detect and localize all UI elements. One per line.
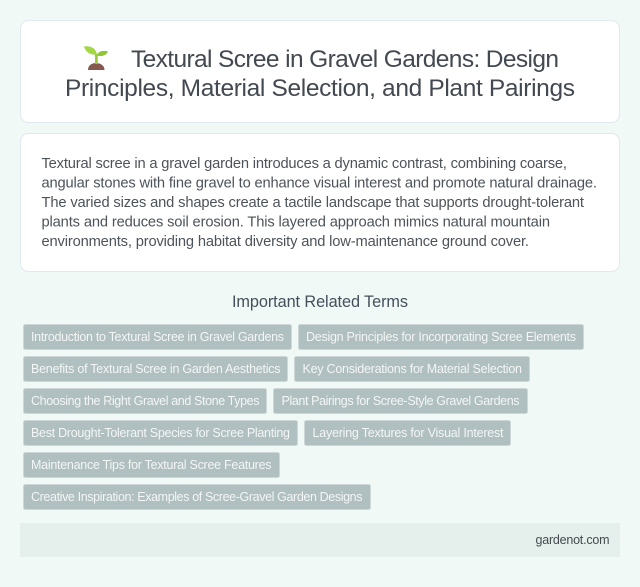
tag: drought-tolerant species bbox=[24, 420, 298, 446]
tag: maintenance tips bbox=[24, 452, 280, 478]
tag: choosing gravel bbox=[24, 388, 266, 414]
title bbox=[65, 46, 575, 102]
description text: plants and reduces soil erosion. This layered approach mimics natural mountain bbox=[42, 214, 550, 230]
tag: key considerations bbox=[294, 356, 530, 382]
tag: introduction bbox=[24, 324, 292, 350]
tag: design principles bbox=[298, 324, 584, 350]
icon: sprout bbox=[84, 46, 108, 70]
description text: Textural scree in a gravel garden introduces a dynamic contrast, combining coarse, bbox=[42, 156, 567, 172]
footer site name: gardenot.com bbox=[536, 533, 610, 547]
related terms tags bbox=[24, 324, 584, 510]
footer bbox=[20, 523, 620, 557]
tag: layering textures: Layering Textures for Visual Interest bbox=[312, 426, 504, 440]
tag: creative inspiration: Creative Inspiration: Examples of Scree-Gravel Garden Designs bbox=[31, 490, 362, 504]
tag: key considerations: Key Considerations for Material Selection bbox=[302, 362, 522, 376]
title: Principles, Material Selection, and Plant Pairings bbox=[65, 75, 575, 102]
description text: The varied sizes and shapes create a tactile landscape that supports drought-tolerant bbox=[42, 195, 584, 211]
tag: introduction: Introduction to Textural Scree in Gravel Gardens bbox=[31, 330, 284, 344]
tag: benefits: Benefits of Textural Scree in Garden Aesthetics bbox=[31, 362, 280, 376]
tag: plant pairings bbox=[274, 388, 528, 414]
tag: layering textures bbox=[304, 420, 510, 446]
tag: design principles: Design Principles for Incorporating Scree Elements bbox=[306, 330, 576, 344]
panel: title card bbox=[20, 20, 620, 122]
tag: plant pairings: Plant Pairings for Scree-Style Gravel Gardens bbox=[282, 394, 520, 408]
tag: creative inspiration bbox=[24, 484, 370, 510]
panel: description card bbox=[20, 134, 620, 272]
tag: choosing gravel: Choosing the Right Gravel and Stone Types bbox=[31, 394, 260, 408]
description text bbox=[42, 156, 597, 250]
tag: maintenance tips: Maintenance Tips for Textural Scree Features bbox=[31, 458, 272, 472]
description text: environments, providing habitat diversity and low-maintenance ground cover. bbox=[42, 234, 529, 250]
heading: important related terms: Important Related Terms bbox=[232, 293, 408, 311]
title: Textural Scree in Gravel Gardens: Design bbox=[131, 46, 559, 73]
description text: angular stones with fine gravel to enhance visual interest and promote natural drainage. bbox=[42, 176, 597, 192]
tag: benefits bbox=[24, 356, 288, 382]
tag: drought-tolerant species: Best Drought-Tolerant Species for Scree Planting bbox=[31, 426, 290, 440]
